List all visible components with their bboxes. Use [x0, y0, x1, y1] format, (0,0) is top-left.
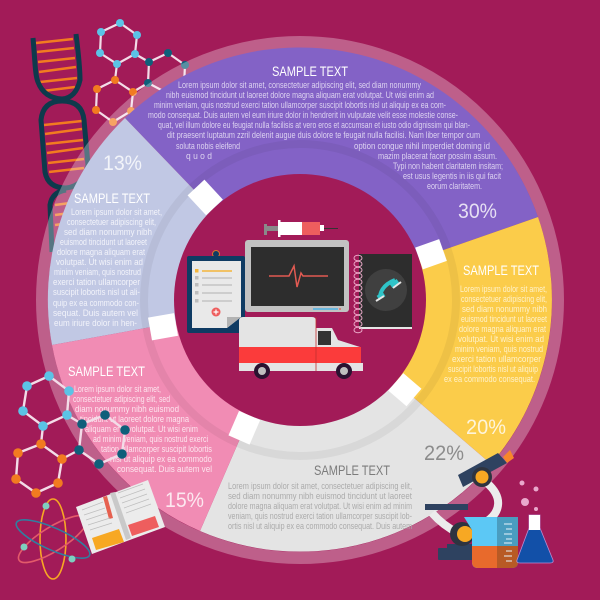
text block: purple: minim veniam, quis nostrud exerci tation ullamcorper suscipit lobortis nisl ut aliquip ex ea com- [154, 100, 446, 110]
heading: pink: SAMPLE TEXT [68, 363, 145, 379]
icon: DNA helix [33, 34, 88, 252]
text block: purple: eorum claritatem. [427, 181, 482, 191]
text block: lavender: minim veniam, quis nostrud [54, 267, 141, 277]
text block: pink [73, 384, 212, 474]
text block: pink: consectetuer adipiscing elit, sed [73, 394, 170, 404]
text block: purple [148, 80, 503, 191]
text block: grey [228, 481, 412, 531]
text block: pink: aliquam erat volutpat. Ut wisi enim [85, 424, 198, 434]
text block: purple: soluta nobis eleifend [176, 141, 240, 151]
text block: pink: consequat. Duis autem vel [117, 464, 212, 474]
text block: pink: ad minim veniam, quis nostrud exerci [93, 434, 208, 444]
text block: purple: Typi non habent claritatem insitam; [393, 161, 503, 171]
text block: purple: quat, vel illum dolore eu feugiat nulla facilisis at vero eros et accumsan et iusto odio dignissim qui blan- [158, 120, 470, 130]
icon: molecule bottom-left [11, 371, 130, 498]
text block: yellow: consectetuer adipiscing elit, [461, 294, 547, 304]
text block: purple: modo consequat. Duis autem vel eum iriure dolor in hendrerit in vulputate velit esse molestie conse- [148, 110, 458, 120]
icon: atom [12, 499, 94, 579]
text block: yellow [444, 284, 547, 384]
text block: lavender: volutpat. Ut wisi enim ad [56, 257, 143, 267]
text block: purple: est usus legentis in iis qui facit [403, 171, 501, 181]
panel: purple 30% [125, 47, 538, 300]
text block: purple: dit praesent luptatum zzril delenit augue duis dolore te feugait nulla facilisi. Nam liber tempor cum [167, 130, 480, 140]
text block: lavender: suscipit lobortis nisl ut ali- [53, 287, 140, 297]
text block: yellow: euismod tincidunt ut laoreet [461, 314, 547, 324]
percentage: 20%: 20% [466, 416, 506, 439]
heading: lavender: SAMPLE TEXT [74, 190, 150, 206]
text block: lavender [53, 207, 162, 328]
panel: yellow 20% [300, 217, 552, 464]
text block: grey: ortis nisl ut aliquip ex ea commodo consequat. Duis autem [228, 521, 412, 531]
centre circle [174, 174, 426, 426]
icon: syringe [264, 220, 338, 237]
text block: purple: nibh euismod tincidunt ut laoreet dolore magna aliquam erat volutpat. Ut wisi enim ad [166, 90, 434, 100]
panel: pink 15% [52, 300, 300, 531]
icon: ambulance [239, 317, 363, 379]
percentage: 15%: 15% [165, 489, 204, 512]
inner shadow ring [144, 144, 456, 456]
icon: flask [517, 480, 553, 563]
text block: grey: veniam, quis nostrud exerci tation ullamcorper suscipit lob- [228, 511, 412, 521]
text block: grey: sed diam nonummy nibh euismod tincidunt ut laoreet [228, 491, 412, 501]
text block: pink: Lorem ipsum dolor sit amet, [74, 384, 161, 394]
heading: yellow: SAMPLE TEXT [463, 262, 539, 278]
text block: lavender: quip ex ea commodo con- [53, 298, 139, 308]
outer translucent ring [42, 42, 558, 558]
text block: pink: nisl ut aliquip ex ea commodo [110, 454, 212, 464]
heading: purple: SAMPLE TEXT [272, 63, 348, 79]
text block: pink: diam nonummy nibh euismod [75, 404, 179, 414]
text block: lavender: eum iriure dolor in hen- [54, 318, 137, 328]
text block: grey: dolore magna aliquam erat volutpat. Ut wisi enim ad minim [228, 501, 412, 511]
icon: microscope [425, 450, 514, 560]
icon: open book [76, 480, 165, 554]
text block: pink: tincidunt ut laoreet dolore magna [80, 414, 190, 424]
text block: yellow: Lorem ipsum dolor sit amet, [460, 284, 547, 294]
icon: notebook with phone [354, 254, 412, 333]
percentage: 13%: 13% [103, 152, 142, 175]
text block: purple: option congue nihil imperdiet doming id [354, 141, 490, 151]
text block: lavender: consectetuer adipiscing elit, [67, 217, 156, 227]
white ring markers [150, 188, 443, 440]
text block: purple: mazim placerat facer possim assum. [378, 151, 497, 161]
text block: yellow: ex ea commodo consequat. [444, 374, 535, 384]
percentage: 22%: 22% [424, 442, 464, 465]
text block: lavender: exerci tation ullamcorper [53, 277, 140, 287]
text block: yellow: suscipit lobortis nisl ut aliquip [448, 364, 538, 374]
panel: grey 22% [200, 300, 491, 552]
icon: clipboard [187, 250, 245, 333]
heading: grey: SAMPLE TEXT [314, 462, 390, 478]
text block: yellow: volutpat. Ut wisi enim ad [458, 334, 544, 344]
text block: purple: Lorem ipsum dolor sit amet, consectetuer adipiscing elit, sed diam nonummy [178, 80, 421, 90]
panel: lavender 13% [48, 118, 300, 345]
text block: purple: q u o d [186, 151, 212, 161]
text block: yellow: dolore magna aliquam erat [459, 324, 546, 334]
icon: molecule top [92, 19, 189, 126]
text block: yellow: sed diam nonummy nibh [462, 304, 547, 314]
text block: lavender: sed diam nonummy nibh [64, 227, 152, 237]
icon: beaker [464, 517, 518, 568]
text block: lavender: Lorem ipsum dolor sit amet, [71, 207, 162, 217]
text block: yellow: minim veniam, quis nostrud [455, 344, 543, 354]
text block: yellow: exerci tation ullamcorper [452, 354, 541, 364]
text block: pink: tation ullamcorper suscipit lobortis [101, 444, 212, 454]
text block: lavender: dolore magna aliquam erat [57, 247, 145, 257]
text block: lavender: sequat. Duis autem vel [53, 308, 138, 318]
text block: grey: Lorem ipsum dolor sit amet, consectetuer adipiscing elit, [228, 481, 412, 491]
text block: lavender: euismod tincidunt ut laoreet [60, 237, 147, 247]
percentage: 30%: 30% [458, 200, 497, 223]
icon: monitor [245, 240, 349, 312]
